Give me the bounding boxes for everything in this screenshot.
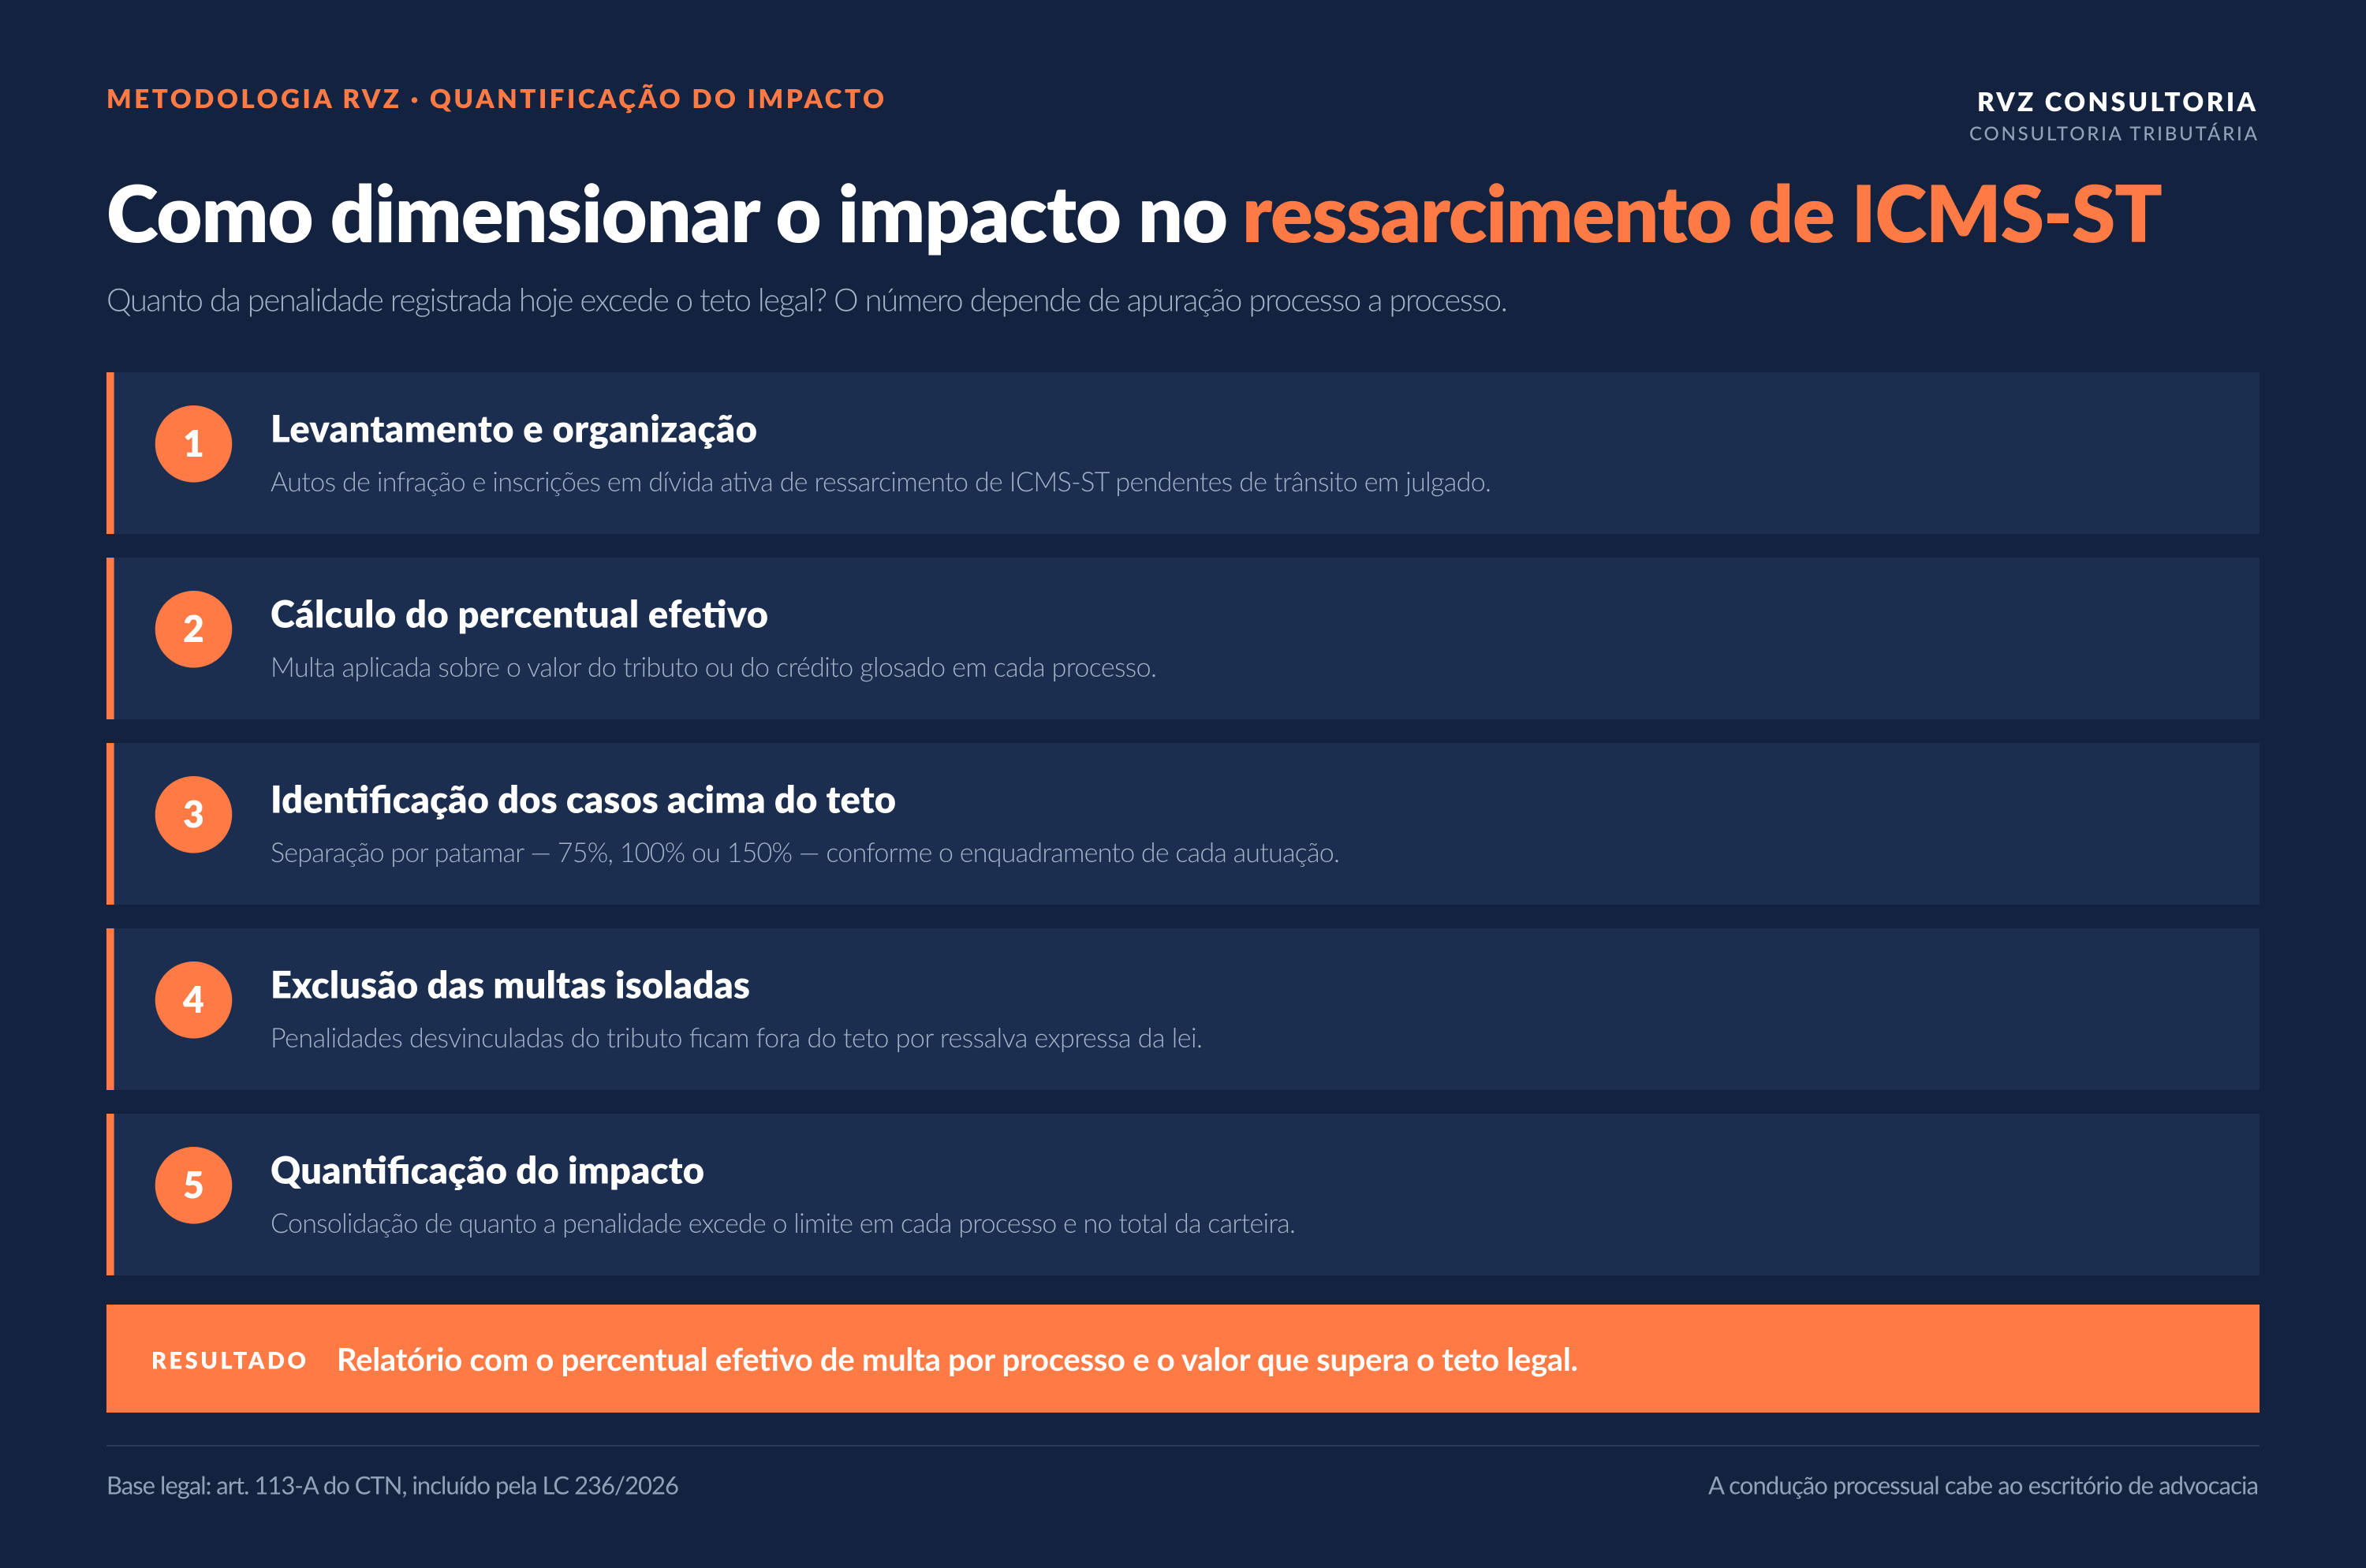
step 1 badge [155, 405, 232, 483]
title: ressarcimento de ICMS-ST [1242, 165, 2163, 259]
step 3 badge: 3 [183, 792, 204, 835]
step 4 badge [155, 961, 232, 1039]
result label: RESULTADO [151, 1347, 306, 1374]
step 1 description: Autos de infração e inscrições em dívida ativa de ressarcimento de ICMS-ST pendentes de trânsito em julgado. [271, 465, 1491, 498]
step 1 heading: Levantamento e organização [271, 407, 757, 451]
result banner [106, 1305, 2260, 1413]
step 3 heading: Identificação dos casos acima do teto [271, 778, 896, 822]
step 4 heading: Exclusão das multas isoladas [271, 962, 750, 1006]
step 2 badge: 2 [183, 607, 204, 650]
step 5 heading: Quantificação do impacto [271, 1148, 704, 1193]
title [106, 165, 2163, 259]
footer right: A condução processual cabe ao escritório de advocacia [1708, 1470, 2259, 1500]
step 5 card [106, 1114, 2260, 1275]
step 4 badge: 4 [182, 977, 204, 1021]
footer left: Base legal: art. 113-A do CTN, incluído pela LC 236/2026 [106, 1470, 679, 1500]
step 5 badge [155, 1147, 232, 1224]
step 4 description: Penalidades desvinculadas do tributo ficam fora do teto por ressalva expressa da lei. [271, 1021, 1203, 1054]
step 3 badge [155, 776, 232, 853]
step 2 badge [155, 591, 232, 668]
title: Como dimensionar o impacto no [106, 165, 1228, 259]
step 5 description: Consolidação de quanto a penalidade excede o limite em cada processo e no total da carteira. [271, 1207, 1296, 1239]
eyebrow: METODOLOGIA RVZ · QUANTIFICAÇÃO DO IMPACTO [106, 83, 884, 114]
brand name: RVZ CONSULTORIA [1977, 86, 2256, 118]
brand tagline: CONSULTORIA TRIBUTÁRIA [1969, 121, 2258, 145]
step 2 description: Multa aplicada sobre o valor do tributo ou do crédito glosado em cada processo. [271, 651, 1157, 683]
step 3 description: Separação por patamar — 75%, 100% ou 150% — conforme o enquadramento de cada autuação. [271, 836, 1340, 868]
step 3 card [106, 743, 2260, 905]
step 2 card [106, 558, 2260, 719]
brand block [1969, 86, 2258, 145]
step 2 heading: Cálculo do percentual efetivo [271, 592, 768, 636]
step 4 card [106, 928, 2260, 1090]
subtitle: Quanto da penalidade registrada hoje excede o teto legal? O número depende de apuração processo a processo. [106, 281, 1508, 319]
result text: Relatório com o percentual efetivo de multa por processo e o valor que supera o teto legal. [337, 1340, 1578, 1378]
step 1 card [106, 372, 2260, 534]
step 1 badge: 1 [183, 421, 204, 465]
step 5 badge: 5 [183, 1163, 204, 1206]
